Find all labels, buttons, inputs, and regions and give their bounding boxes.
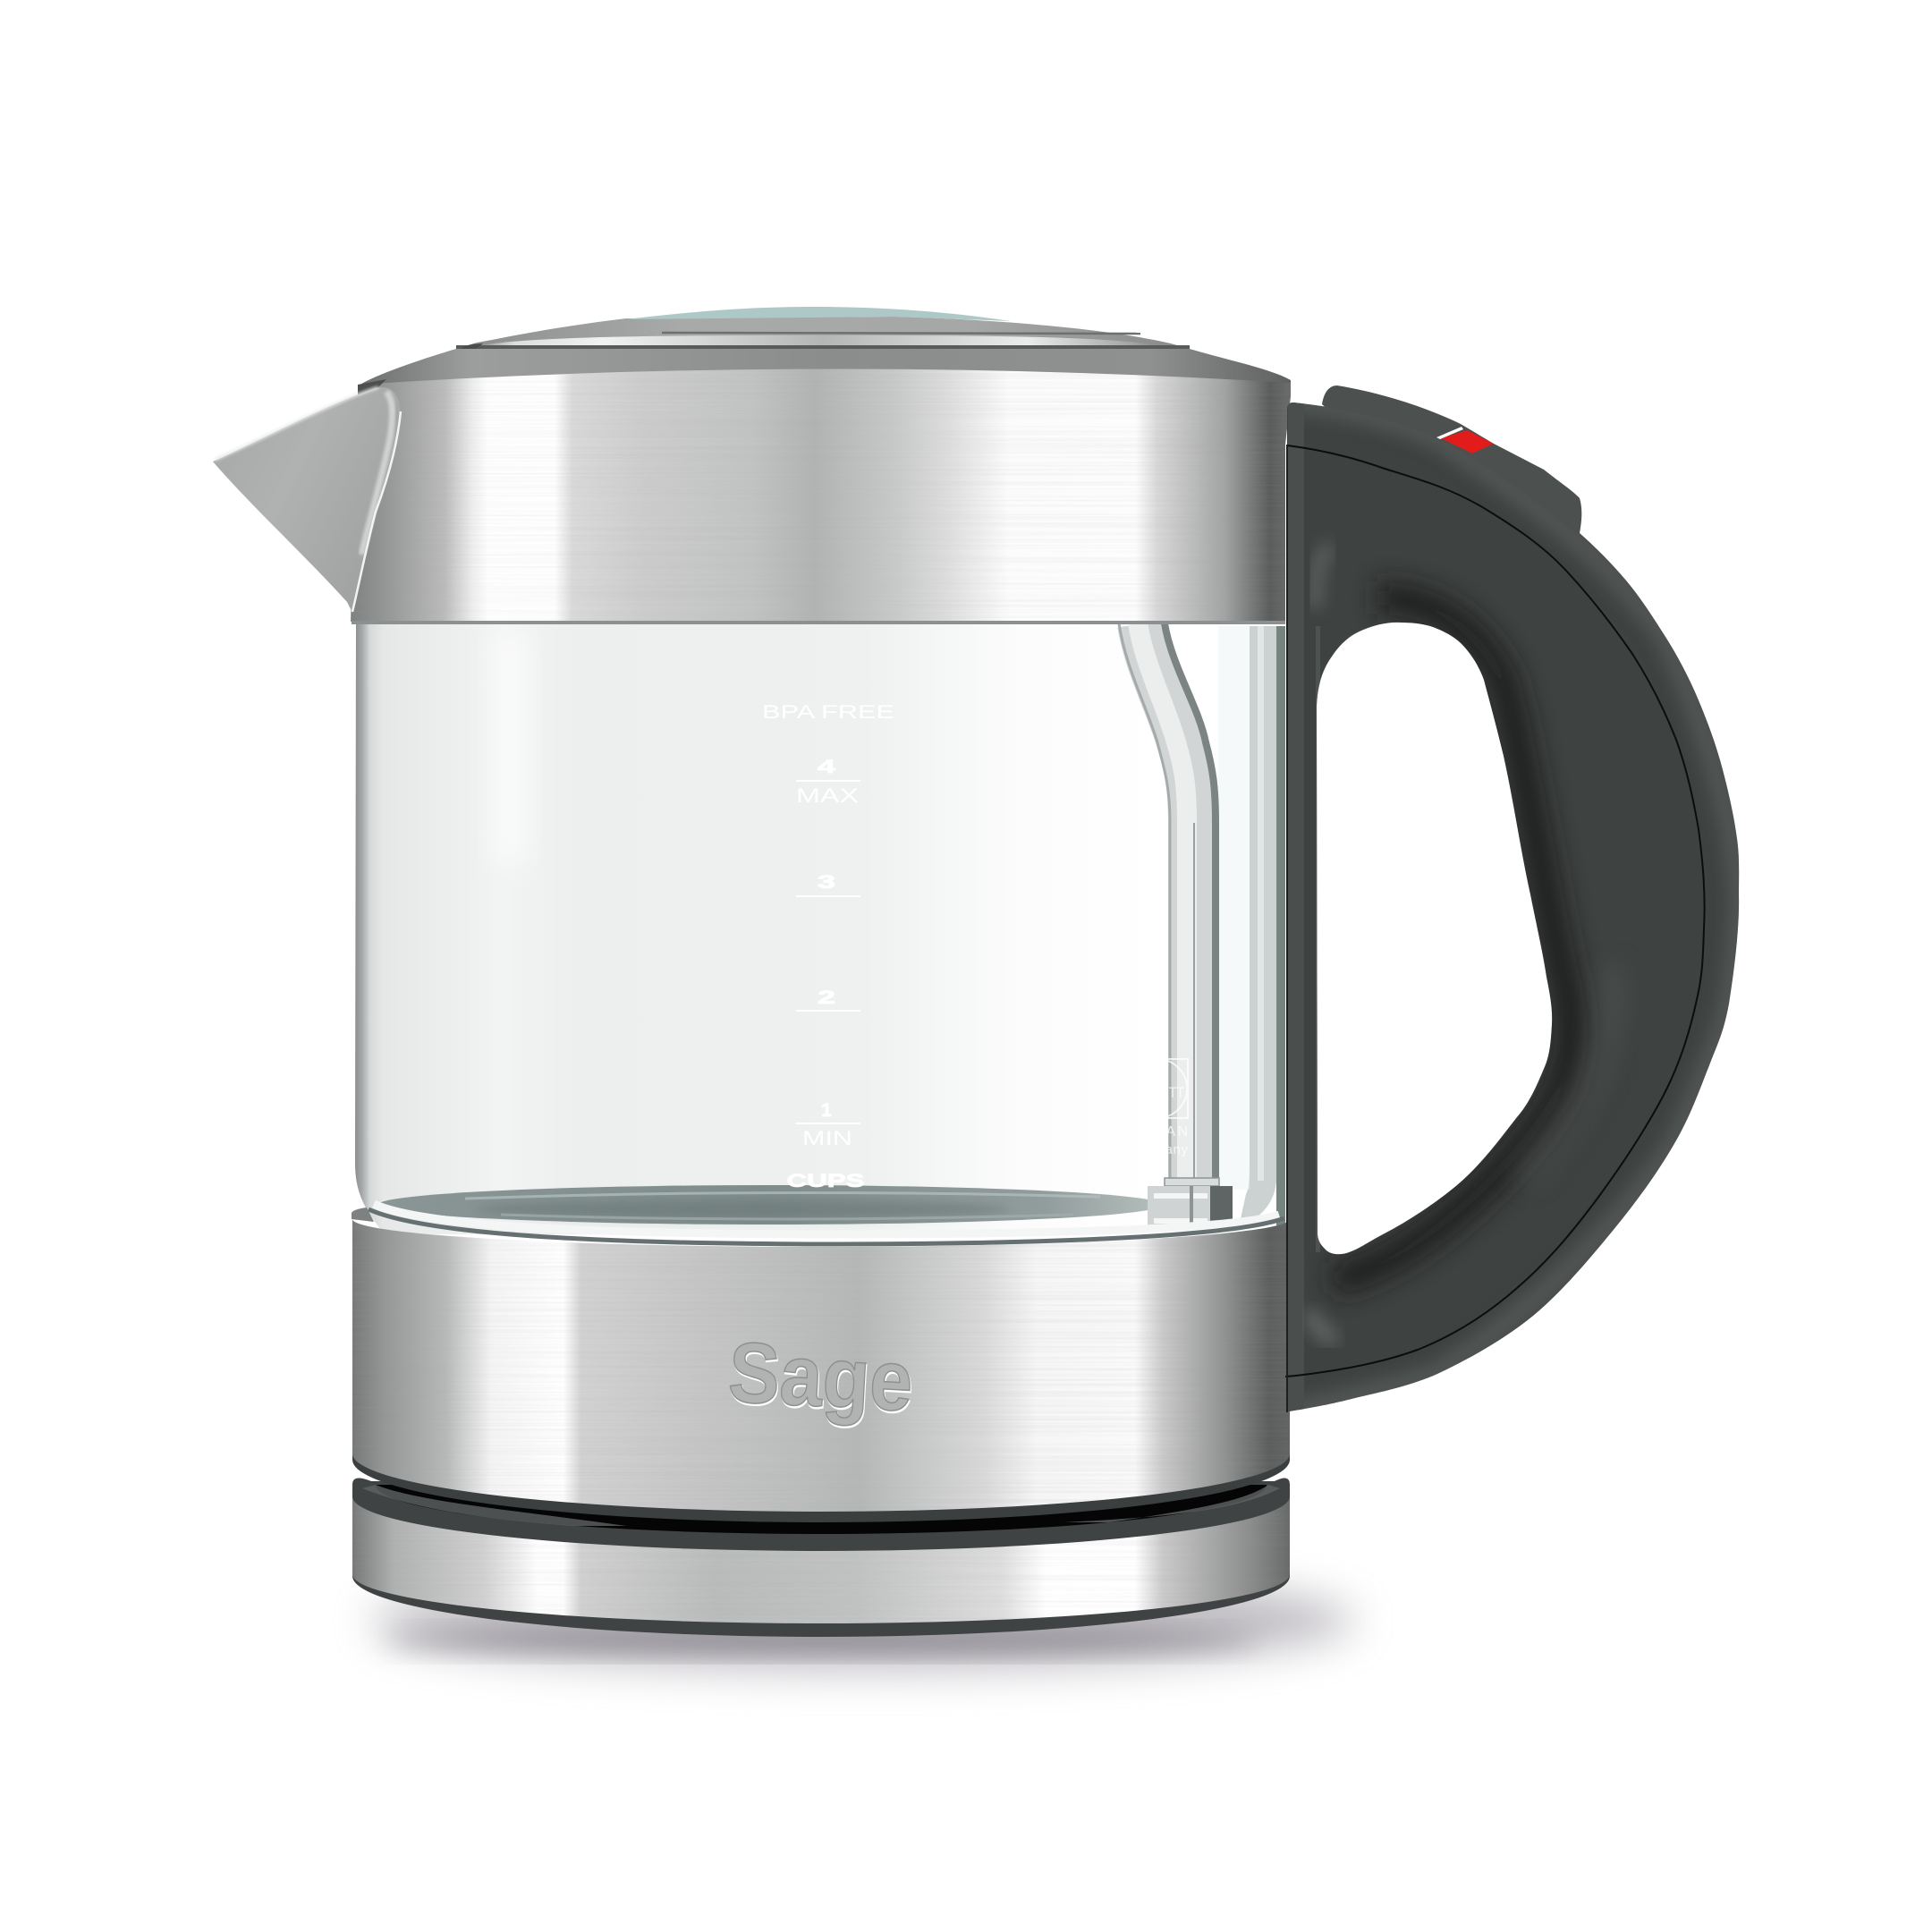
mark: 1 MIN: MIN	[802, 1127, 852, 1149]
embossed logo: Sage	[727, 1326, 916, 1431]
mark: 4 MAX: 4	[818, 757, 836, 777]
mark: 3	[796, 872, 860, 897]
handle body	[1287, 402, 1739, 1411]
mark: 1 MIN: 1	[821, 1100, 832, 1121]
kettle product illustration	[213, 307, 1739, 1694]
SCHOTT DURAN mark: Germany	[1129, 1142, 1188, 1157]
glass left highlight	[490, 631, 530, 863]
mark: 2: 2	[818, 987, 835, 1008]
lid glass window	[626, 307, 1011, 321]
tube fitting	[1148, 1178, 1233, 1225]
base dark ring	[352, 1479, 1290, 1637]
upper metal collar	[351, 362, 1292, 624]
SCHOTT DURAN mark: SCHOTT	[1132, 1084, 1184, 1101]
glass base rim	[369, 1204, 1284, 1244]
handle left wall	[1286, 445, 1288, 1412]
ground shadow	[371, 1572, 1355, 1669]
right glass wall	[1218, 626, 1285, 1227]
handle seam	[1285, 445, 1705, 1377]
mark: 2	[796, 987, 860, 1012]
spout	[213, 387, 401, 612]
mark: 3: 3	[818, 872, 835, 893]
power base	[352, 1479, 1290, 1637]
red indicator	[1436, 427, 1494, 453]
lower metal body	[352, 1208, 1290, 1522]
base gap	[376, 1485, 1267, 1534]
shoulder	[358, 349, 1291, 386]
glass jug	[355, 623, 1285, 1244]
mark: 4 MAX: MAX	[796, 784, 859, 807]
lid metal dome	[456, 317, 1190, 356]
cup markings	[762, 702, 894, 1191]
base metal band	[352, 1496, 1290, 1623]
inner tube gauge	[1119, 623, 1216, 1185]
handle button	[1322, 386, 1581, 533]
handle	[1285, 386, 1739, 1413]
label: BPA FREE: BPA FREE	[762, 702, 894, 723]
mark: 1 MIN	[796, 1100, 860, 1149]
lower body dark edge	[352, 1449, 1290, 1522]
lid rim	[462, 335, 1185, 351]
body lip	[352, 1208, 374, 1222]
SCHOTT DURAN mark	[1128, 1059, 1188, 1157]
label: CUPS: CUPS	[787, 1171, 864, 1191]
lid	[456, 307, 1190, 356]
mark: 4 MAX	[796, 757, 860, 807]
SCHOTT DURAN mark: DURAN	[1129, 1124, 1188, 1140]
glass wall	[355, 623, 1284, 1234]
embossed logo: Sage	[726, 1325, 915, 1429]
water pool	[377, 1185, 1163, 1224]
handle shading	[1288, 402, 1739, 1413]
